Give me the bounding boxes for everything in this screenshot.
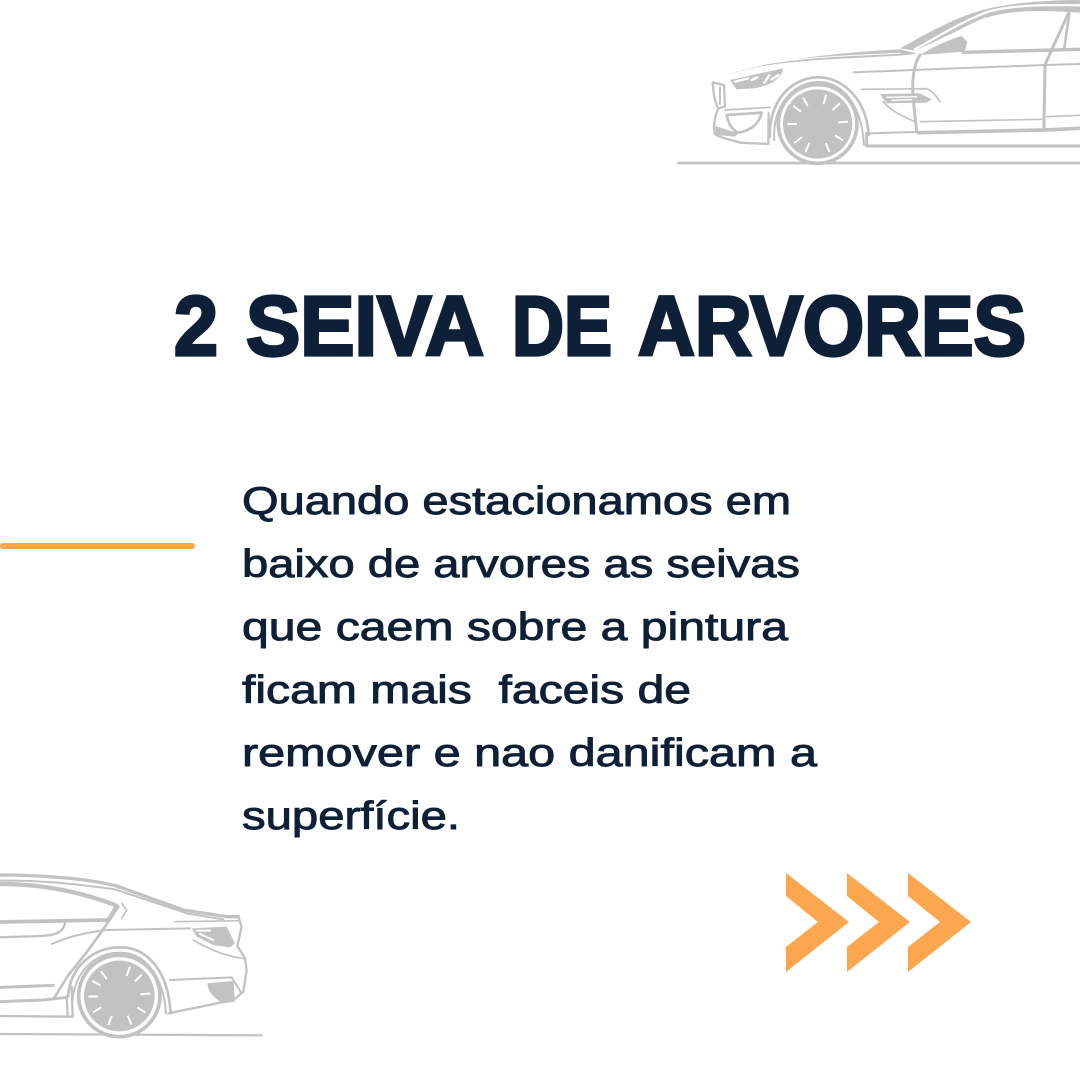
wheel arch [68,947,171,1013]
wheel spokes [86,967,152,1025]
rear bumper [170,977,242,993]
wheel [79,955,160,1037]
ground line [0,1034,262,1035]
grille and bumper [713,83,725,108]
icon: rear car line drawing [0,875,262,1037]
title: 2 [174,279,218,373]
wheel arch [770,77,869,137]
accent line [0,543,195,549]
door lines [0,923,65,937]
body text: baixo de arvores as seivas [242,543,800,586]
body text: remover e nao danificam a [242,732,817,775]
wheel spokes [787,93,848,153]
headlight [730,68,783,89]
icon: front car line drawing [678,0,1080,163]
wheel [778,85,857,163]
icon: triple chevron arrows [786,873,971,972]
side mirror [920,36,967,55]
title [174,279,1026,373]
body text: que caem sobre a pintura [242,606,788,649]
tail light [192,927,235,947]
window sill and pillar [963,49,1080,52]
car roof and windshield [900,0,1080,51]
body text [242,480,817,838]
door and body lines [913,55,920,132]
roof [0,875,238,917]
hood [725,49,917,76]
body text: Quando estacionamos em [242,480,791,523]
title: DE [512,279,612,373]
tail and spoiler [175,918,240,924]
body text: ficam mais faceis de [242,669,691,712]
body text: superfície. [242,795,460,838]
title: SEIVA [246,279,484,373]
title: ARVORES [638,279,1026,373]
rear window [0,884,115,905]
ground line [678,159,1080,167]
